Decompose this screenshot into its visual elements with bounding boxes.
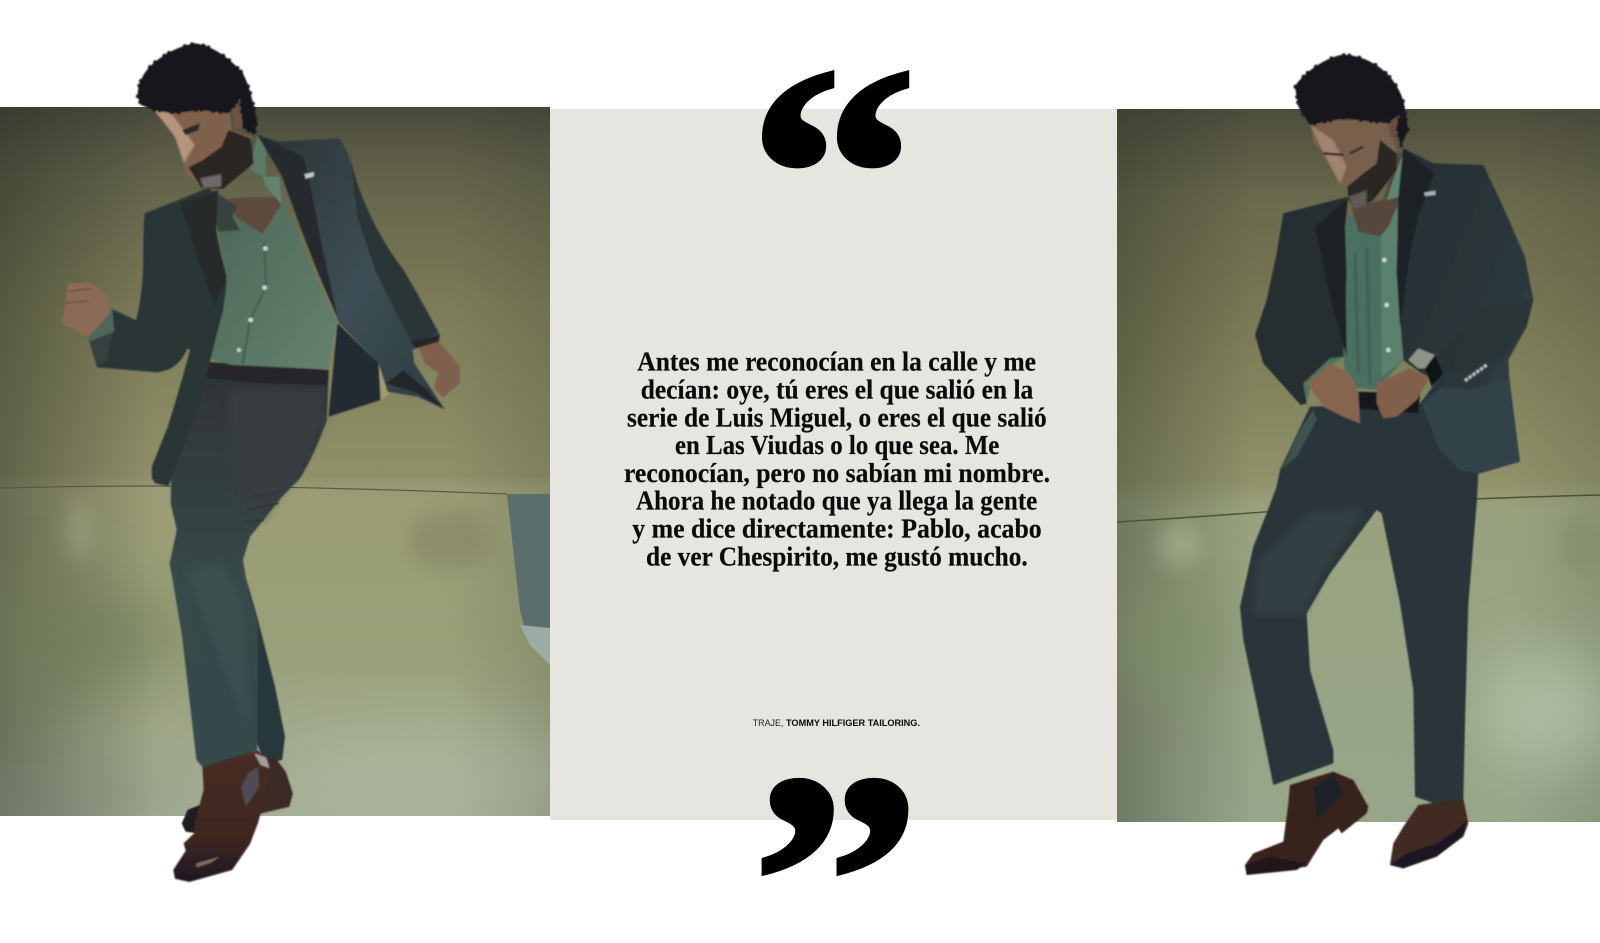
beard [189, 130, 254, 189]
shirt buttons [1382, 258, 1391, 352]
figure: man in suit, right photo [1240, 55, 1533, 875]
face [154, 97, 252, 190]
left hand [62, 283, 110, 336]
right hand [1377, 368, 1430, 418]
icon: opening quotation mark: “ [748, 4, 918, 346]
text block: quote: decían: oye, tú eres el que salió en la [641, 374, 1034, 404]
jacket left side [89, 187, 227, 486]
text block: quote: Ahora he notado que ya llega la gente [636, 486, 1037, 516]
back leg [246, 580, 285, 763]
jacket right side [1397, 148, 1533, 473]
back boot [259, 755, 293, 814]
text block: credit caption: TOMMY HILFIGER TAILORING. [786, 717, 920, 728]
figure: man in suit, left photo [62, 43, 460, 833]
photo background: left studio paper [0, 107, 570, 830]
text block: quote: reconocían, pero no sabían mi nombre. [624, 458, 1050, 488]
text block: quote [624, 347, 1050, 571]
right hand and wrist [416, 339, 460, 397]
shirt buttons [237, 246, 268, 352]
text block: quote: Antes me reconocían en la calle y me [637, 347, 1036, 377]
ear [1388, 114, 1402, 140]
trousers [1240, 403, 1478, 807]
collar and neck [1352, 152, 1405, 237]
text block: quote: serie de Luis Miguel, o eres el que salió [627, 402, 1047, 432]
panel: quote background [550, 109, 1117, 820]
belt [205, 362, 329, 385]
text block: quote: y me dice directamente: Pablo, acabo [632, 514, 1042, 544]
hair [1295, 55, 1408, 147]
ear [231, 96, 246, 130]
face [1310, 120, 1397, 207]
open collar [212, 190, 240, 232]
text block: quote: de ver Chespirito, me gustó mucho. [646, 541, 1028, 571]
text block: quote: en Las Viudas o lo que sea. Me [675, 430, 999, 460]
photo background: right studio paper [1110, 109, 1600, 822]
jacket right side [257, 135, 445, 409]
jacket flap under left arm [1283, 410, 1317, 468]
shirt [1343, 200, 1403, 390]
jacket inner lining [329, 323, 380, 417]
lapel pin [304, 172, 314, 179]
figure: left photo front boot [173, 750, 270, 882]
watch [1408, 348, 1435, 368]
jacket left side [1255, 197, 1348, 405]
shirt [206, 197, 336, 369]
beard [1347, 140, 1397, 210]
left cuff [1303, 357, 1343, 402]
chest skin [229, 197, 282, 234]
right boot [1390, 798, 1468, 868]
left hand [1307, 363, 1360, 423]
text block: credit caption: TRAJE, [753, 717, 783, 728]
front trouser leg [170, 363, 329, 768]
sleeve buttons [1465, 365, 1487, 381]
hair [137, 43, 257, 135]
lapel pin [1424, 191, 1435, 196]
left boot [1245, 772, 1368, 875]
belt [1353, 392, 1420, 413]
